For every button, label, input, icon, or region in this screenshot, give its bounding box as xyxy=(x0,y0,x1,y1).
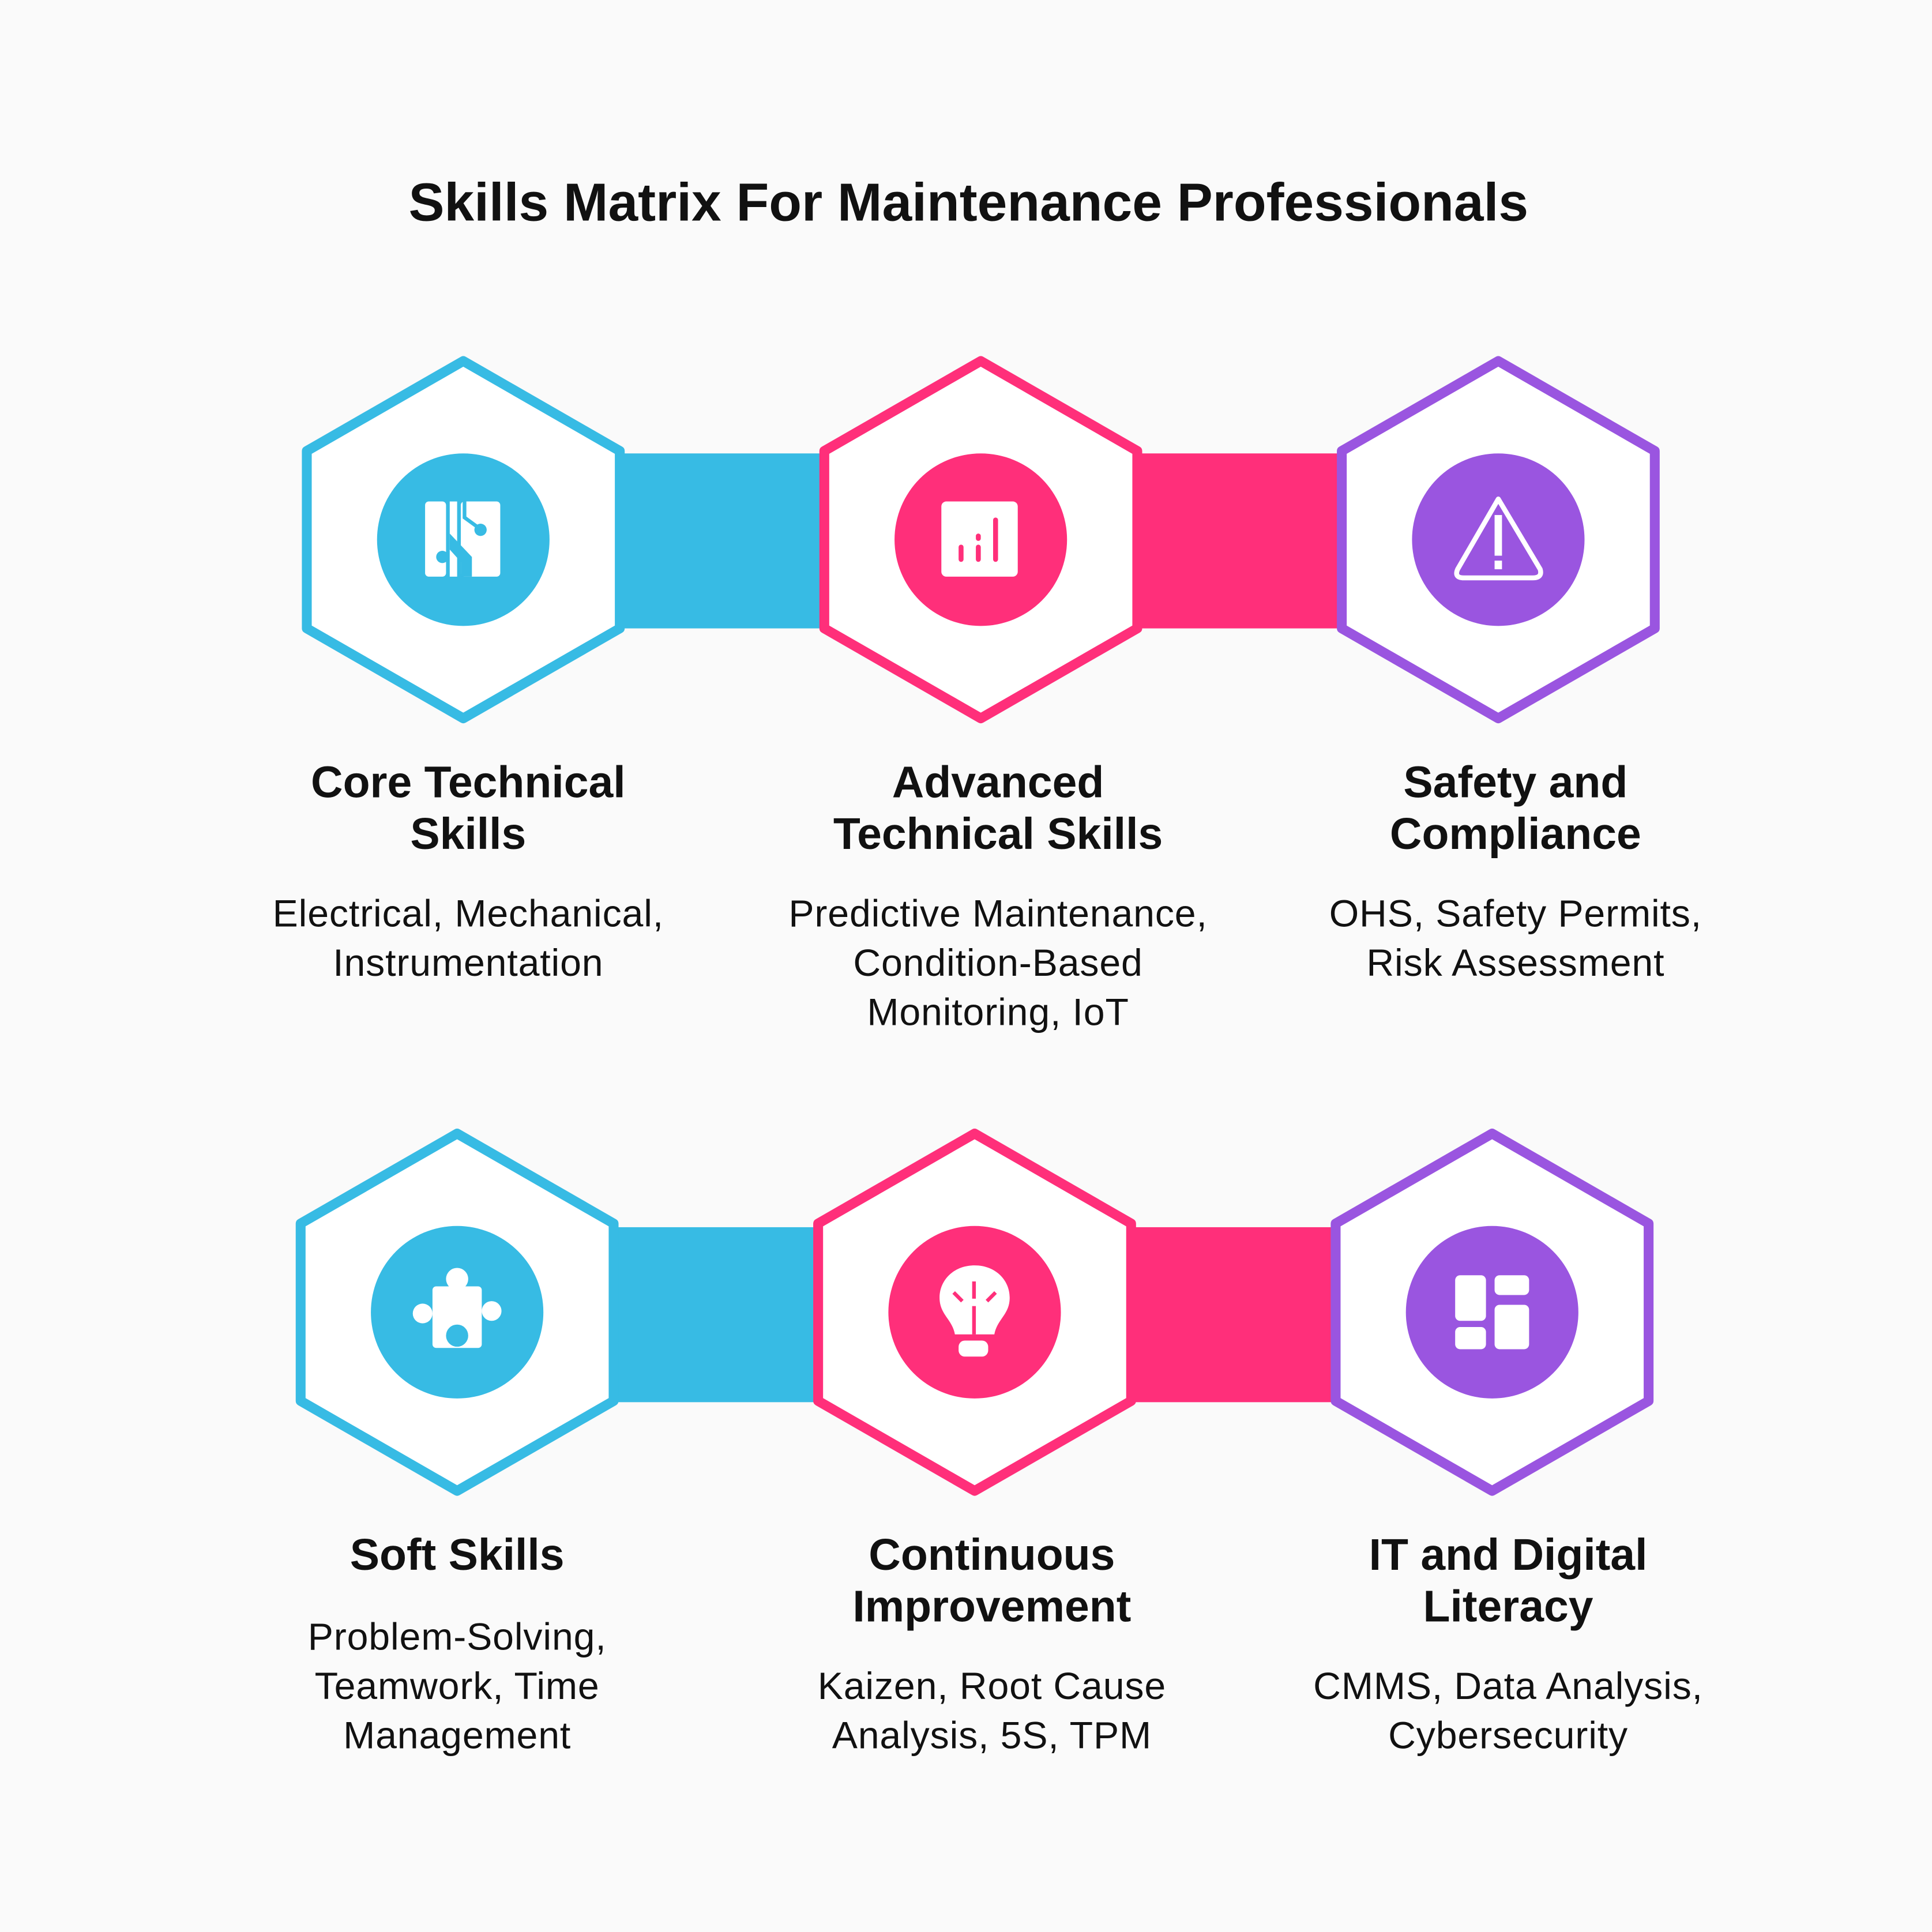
connector bars row 1 xyxy=(604,453,1355,629)
text: advanced technical skills xyxy=(788,757,1208,1034)
text: core technical skills xyxy=(273,757,664,984)
text: safety and compliance xyxy=(1329,757,1702,984)
hexagon: continuous improvement xyxy=(818,1134,1131,1491)
icon: chart xyxy=(941,502,1018,577)
text: IT and digital literacy xyxy=(1313,1530,1703,1757)
icon: dashboard xyxy=(1455,1275,1529,1349)
text: core technical skills: Core Technical xyxy=(311,757,626,807)
connector bars row 2 xyxy=(597,1227,1349,1402)
text: safety and compliance: Risk Assessment xyxy=(1366,942,1664,984)
text: advanced technical skills: Predictive Maintenance, xyxy=(788,893,1208,935)
text: IT and digital literacy: IT and Digital xyxy=(1369,1530,1647,1580)
text: soft skills xyxy=(308,1530,607,1757)
text: IT and digital literacy: Literacy xyxy=(1423,1582,1593,1632)
text: soft skills: Teamwork, Time xyxy=(315,1665,600,1708)
text: continuous improvement: Analysis, 5S, TPM xyxy=(832,1715,1152,1757)
text: continuous improvement: Kaizen, Root Cause xyxy=(818,1665,1166,1708)
hexagon: advanced technical skills xyxy=(824,361,1137,719)
hexagon: safety and compliance xyxy=(1342,361,1655,719)
text: IT and digital literacy: Cybersecurity xyxy=(1388,1715,1628,1757)
text: safety and compliance: Compliance xyxy=(1390,809,1641,859)
text: soft skills: Soft Skills xyxy=(350,1530,565,1580)
hexagon: IT and digital literacy xyxy=(1336,1134,1649,1491)
text: core technical skills: Instrumentation xyxy=(333,942,603,984)
text: IT and digital literacy: CMMS, Data Analysis, xyxy=(1313,1665,1703,1708)
text: advanced technical skills: Condition-Based xyxy=(853,942,1143,984)
icon: circuit board xyxy=(425,502,500,577)
hexagon: soft skills xyxy=(300,1134,614,1491)
text: continuous improvement: Improvement xyxy=(852,1582,1131,1632)
text: safety and compliance: Safety and xyxy=(1403,757,1627,807)
icon: light bulb xyxy=(939,1265,1010,1356)
text: continuous improvement xyxy=(818,1530,1166,1757)
text: continuous improvement: Continuous xyxy=(869,1530,1115,1580)
text: core technical skills: Electrical, Mechanical, xyxy=(273,893,664,935)
text: advanced technical skills: Technical Skills xyxy=(833,809,1163,859)
text: core technical skills: Skills xyxy=(410,809,526,859)
icon: warning xyxy=(1457,499,1540,578)
icon: puzzle xyxy=(413,1268,502,1348)
text: soft skills: Problem-Solving, xyxy=(308,1616,607,1659)
text: soft skills: Management xyxy=(343,1715,571,1757)
text: safety and compliance: OHS, Safety Permits, xyxy=(1329,893,1702,935)
text: advanced technical skills: Monitoring, IoT xyxy=(867,991,1129,1034)
title: Skills Matrix For Maintenance Professionals xyxy=(408,172,1528,232)
hexagon: core technical skills xyxy=(307,361,620,719)
text: advanced technical skills: Advanced xyxy=(892,757,1104,807)
